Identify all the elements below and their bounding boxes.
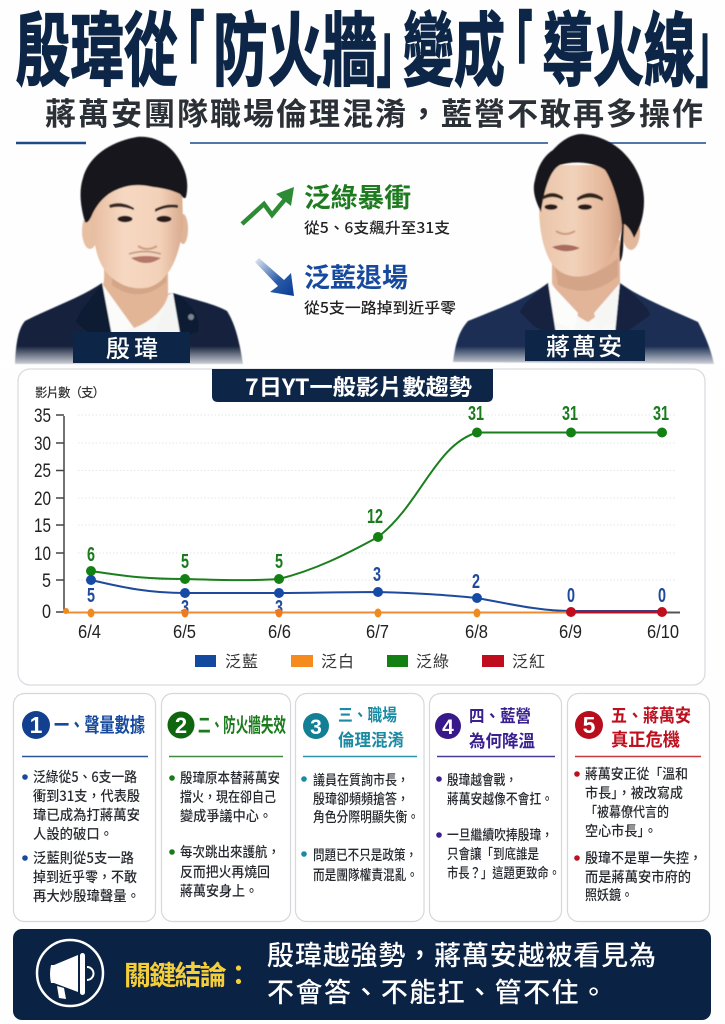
card 3 text — [301, 770, 419, 885]
card 3 text: 角色分際明顯失衡。 — [313, 807, 419, 827]
panel: card 3 — [296, 694, 424, 922]
callout: 泛綠暴衝: 泛綠暴衝 — [304, 176, 411, 215]
card 1 text: 瑋已成為打蔣萬安 — [33, 805, 140, 825]
chart title: 7日YT一般影片數趨勢 — [245, 370, 472, 402]
series: 泛綠: 31 — [653, 403, 669, 425]
icon: blue down arrow — [255, 258, 294, 296]
card 5 heading: 五、蔣萬安 — [611, 702, 691, 728]
card 4 text: 一旦繼續吹捧殷瑋， — [447, 825, 553, 845]
y axis labels: 30 — [34, 434, 51, 455]
card 1 text: 泛藍則從5支一路 — [33, 848, 134, 868]
card 2 text: 擋火，現在卻自己 — [180, 787, 276, 807]
y axis labels: 25 — [34, 461, 51, 482]
title — [16, 0, 725, 103]
conclusion text: 殷瑋越強勢，蔣萬安越被看見為 — [267, 934, 656, 973]
series: 泛綠: 5 — [275, 551, 283, 573]
series: 泛藍: 3 — [373, 564, 381, 586]
badge 4 — [435, 713, 461, 739]
card 1 text — [22, 767, 140, 906]
y axis labels: 20 — [34, 489, 51, 510]
fade under portraits — [0, 346, 725, 369]
series: 泛藍: 5 — [87, 585, 95, 607]
card 5 text: 空心市長」。 — [585, 821, 657, 841]
card 1 text: 再大炒殷瑋聲量。 — [33, 886, 140, 906]
panel: key conclusion — [13, 929, 711, 1020]
card 5 text: 而是蔣萬安市府的 — [585, 867, 691, 887]
y axis labels: 5 — [42, 571, 51, 592]
card 2 text: 殷瑋原本替蔣萬安 — [180, 768, 280, 788]
icon: green up arrow — [242, 187, 294, 224]
badge 1 — [22, 711, 50, 739]
card 5 text: 蔣萬安正從「溫和 — [585, 764, 688, 784]
card 3 text: 議員在質詢市長， — [313, 770, 409, 790]
callout: 泛綠暴衝: 從5、6支飆升至31支 — [304, 217, 450, 238]
callout: 泛綠暴衝 — [304, 176, 450, 238]
name tag: 殷瑋 — [73, 329, 190, 364]
series: 泛綠 — [86, 403, 669, 584]
badge 3: 3 — [310, 716, 322, 739]
series: 泛藍: 0 — [567, 585, 575, 607]
legend: 泛紅 — [512, 648, 545, 672]
icon: megaphone — [37, 940, 103, 1006]
badge 4: 4 — [442, 716, 454, 739]
series: 泛藍: 3 — [181, 597, 189, 619]
legend: 泛綠 — [416, 648, 449, 672]
card 1 text: 人設的破口。 — [33, 824, 113, 844]
series: 泛藍: 3 — [275, 597, 283, 619]
series: 泛紅 — [566, 607, 667, 617]
card 1 text: 衝到31支，代表殷 — [33, 786, 140, 806]
panel: card 4 — [430, 694, 562, 922]
name tag: 蔣萬安 — [525, 327, 645, 362]
card 2 text: 蔣萬安身上。 — [180, 881, 258, 901]
y axis labels: 10 — [34, 544, 51, 565]
conclusion label: 關鍵結論： — [124, 954, 252, 993]
badge 5 — [575, 711, 603, 739]
conclusion text — [267, 934, 656, 1010]
legend: 泛藍 — [225, 648, 258, 672]
card 4 text: 只會讓「到底誰是 — [447, 844, 539, 864]
subtitle: 蔣萬安團隊職場倫理混淆，藍營不敢再多操作 — [45, 89, 703, 134]
card 5 heading: 真正危機 — [611, 726, 680, 752]
series: 泛綠: 5 — [181, 551, 189, 573]
series: 泛藍: 2 — [472, 571, 480, 593]
card 5 text: 照妖鏡。 — [585, 885, 633, 905]
y axis labels: 15 — [34, 516, 51, 537]
card 2 text: 變成爭議中心。 — [180, 806, 272, 826]
card 4 text — [436, 770, 560, 883]
y axis labels: 35 — [34, 406, 51, 427]
badge 2: 2 — [175, 713, 187, 738]
card 3 heading — [338, 701, 404, 751]
card 5 text: 殷瑋不是單一失控， — [585, 848, 702, 868]
name tag: 殷瑋: 殷瑋 — [106, 329, 158, 364]
card 5 heading — [611, 702, 691, 752]
card 3 text: 殷瑋卻頻頻搶答， — [313, 789, 409, 809]
card 2 text: 每次跳出來護航， — [180, 842, 280, 862]
portrait: 蔣萬安 — [453, 134, 714, 364]
series: 泛藍: 0 — [658, 585, 666, 607]
callout: 泛藍退場: 泛藍退場 — [304, 256, 408, 295]
legend: 泛白 — [321, 648, 354, 672]
x axis labels — [78, 622, 679, 642]
card 2 heading: 二、防火牆失效 — [198, 709, 286, 738]
conclusion text: 不會答、不能扛、管不住。 — [267, 971, 607, 1010]
card 4 heading: 為何降溫 — [469, 727, 535, 752]
panel: card 2 — [162, 694, 290, 922]
y axis labels — [34, 406, 51, 623]
callout: 泛藍退場 — [304, 256, 456, 318]
card 1 text: 泛綠從5、6支一路 — [33, 767, 137, 787]
card 5 text: 市長」，被改寫成 — [585, 783, 683, 803]
card 2 text: 反而把火再燒回 — [180, 862, 270, 882]
badge 5: 5 — [583, 712, 596, 738]
line chart — [34, 403, 680, 642]
series: 泛綠: 12 — [367, 506, 383, 528]
badge 3 — [303, 713, 329, 739]
x axis labels: 6/4 — [78, 622, 101, 642]
card 4 text: 市長？」這題更致命。 — [447, 863, 560, 883]
card 3 text: 而是團隊權責混亂。 — [313, 865, 418, 885]
card 1 text: 掉到近乎零，不敢 — [33, 867, 137, 887]
series: 泛白 — [63, 608, 571, 618]
callout: 泛藍退場: 從5支一路掉到近乎零 — [304, 297, 456, 318]
portrait: 殷瑋 — [15, 137, 243, 364]
card 5 text — [574, 764, 702, 905]
panel: card 5 — [568, 694, 710, 922]
card 5 text: 「被幕僚代言的 — [585, 802, 669, 822]
card 3 heading: 倫理混淆 — [338, 726, 404, 751]
panel: chart — [18, 369, 705, 685]
y axis labels: 0 — [42, 602, 51, 623]
card 3 text: 問題已不只是政策， — [313, 845, 417, 865]
x axis labels: 6/6 — [268, 622, 291, 642]
card 4 text: 蔣萬安越像不會扛。 — [447, 789, 553, 809]
badge 1: 1 — [30, 712, 43, 738]
name tag: 蔣萬安: 蔣萬安 — [546, 327, 622, 362]
card 3 heading: 三、職場 — [338, 701, 397, 726]
x axis labels: 6/9 — [559, 622, 582, 642]
axis title: 影片數（支） — [35, 382, 105, 401]
x axis labels: 6/5 — [173, 622, 196, 642]
badge 2 — [168, 712, 194, 738]
series: 泛綠: 31 — [562, 403, 578, 425]
series: 泛綠: 6 — [87, 544, 95, 566]
series: 泛藍 — [86, 564, 666, 619]
card 2 text — [169, 768, 280, 901]
panel: card 1 — [14, 694, 156, 922]
legend — [195, 648, 545, 672]
series: 泛綠: 31 — [468, 403, 484, 425]
x axis labels: 6/10 — [647, 622, 679, 642]
card 4 heading — [469, 702, 535, 752]
card 4 text: 殷瑋越會戰， — [447, 770, 517, 790]
x axis labels: 6/8 — [465, 622, 488, 642]
card 4 heading: 四、藍營 — [469, 702, 531, 727]
x axis labels: 6/7 — [366, 622, 389, 642]
card 1 heading: 一、聲量數據 — [54, 709, 145, 738]
